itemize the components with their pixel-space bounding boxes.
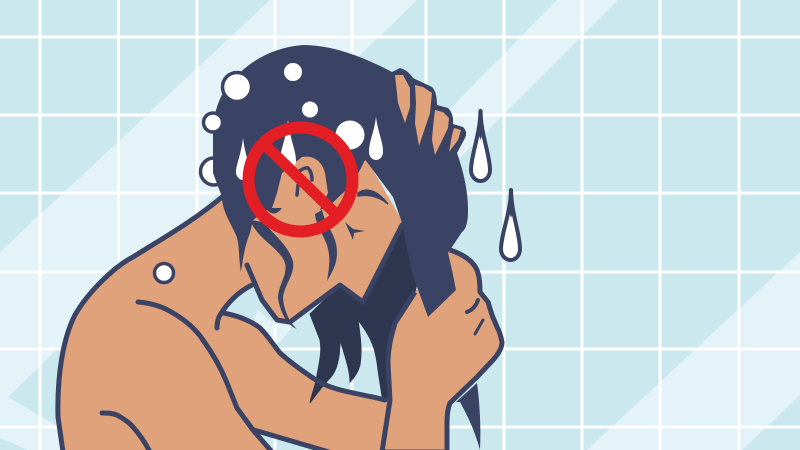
hair: right strand over face xyxy=(315,210,337,281)
person: fingers xyxy=(395,75,461,155)
bubble: near forehead xyxy=(336,120,364,150)
water drop: upper drop neck xyxy=(478,109,483,140)
water drop: on hair centre xyxy=(280,120,296,170)
hair: dark underside xyxy=(310,222,425,403)
hair: main mass with fingers behind it xyxy=(213,45,468,317)
water drop: lower drop neck xyxy=(509,188,513,218)
person: eyebrow xyxy=(358,190,388,204)
bubble: left of head xyxy=(204,113,222,132)
bubble: centre of head xyxy=(302,102,318,118)
hair: tail below hand xyxy=(456,383,480,450)
person: torso, neck and face xyxy=(58,140,402,450)
bubble: top left of head xyxy=(222,72,252,102)
bubble: top of head xyxy=(284,63,302,81)
prohibition sign xyxy=(248,128,352,232)
water drop: falling lower xyxy=(501,190,520,260)
hair: left strand over face xyxy=(250,220,297,329)
bubble: behind head, left xyxy=(200,158,228,185)
bubble: on shoulder xyxy=(154,264,174,282)
water drop: on hair left xyxy=(236,138,250,180)
person: closed eye xyxy=(345,222,365,240)
person: hand and forearm xyxy=(382,250,502,450)
water drop: falling upper xyxy=(471,111,490,181)
water drop: on hair right xyxy=(369,117,383,160)
person: body outlines xyxy=(58,168,483,450)
